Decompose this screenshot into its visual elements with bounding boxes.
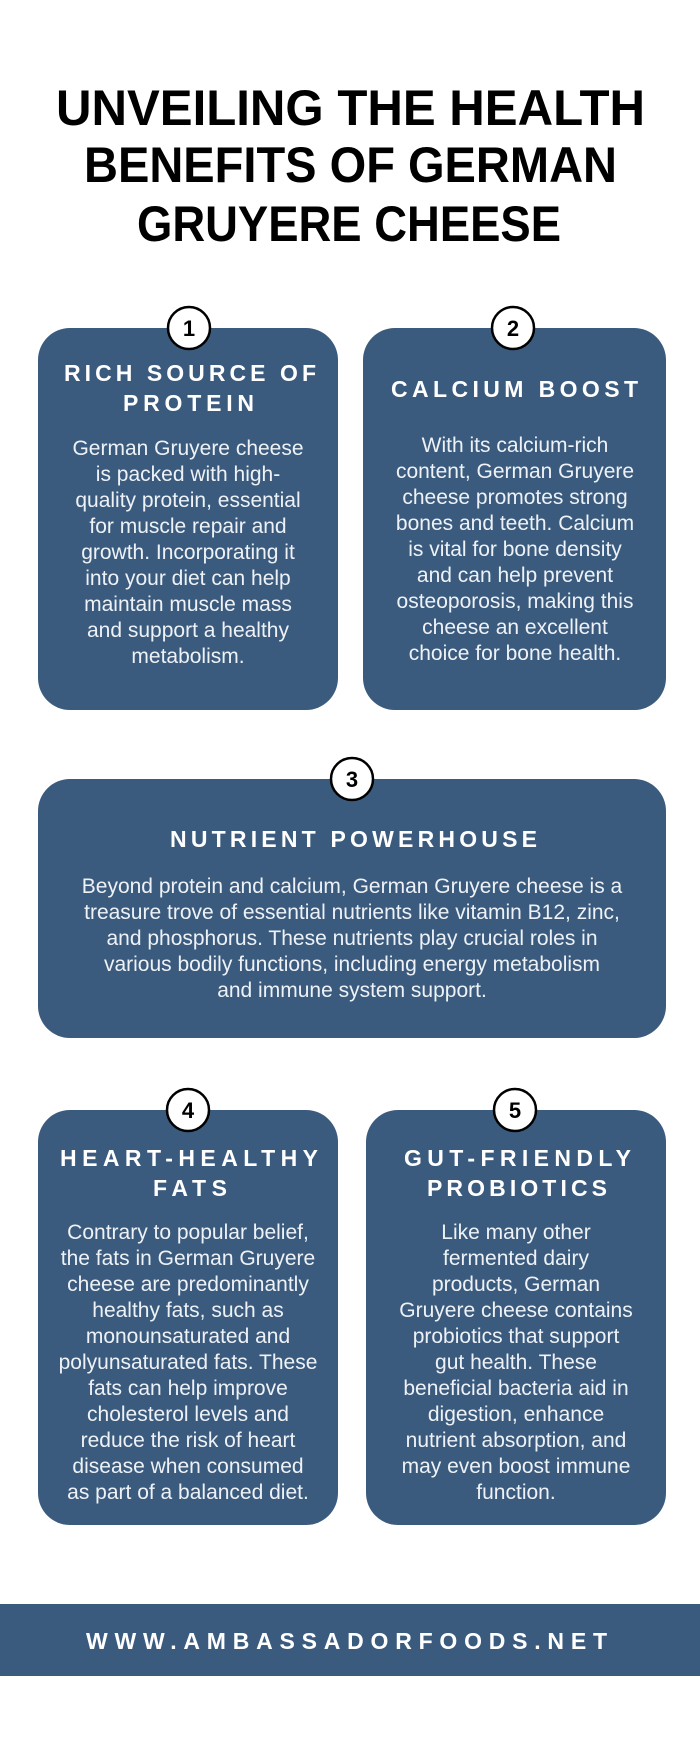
heading 4: FATS <box>153 1175 227 1201</box>
text 5: beneficial bacteria aid in <box>403 1377 629 1400</box>
text 5: products, German <box>432 1273 600 1296</box>
title: GRUYERE CHEESE <box>137 196 561 252</box>
text 2 <box>396 434 634 665</box>
badge 2: 2 <box>507 316 519 341</box>
badge 3 <box>331 758 373 800</box>
text 4: reduce the risk of heart <box>81 1429 296 1452</box>
text 5: probiotics that support <box>413 1325 619 1348</box>
text 3: various bodily functions, including energy metabolism <box>104 953 600 976</box>
text 4: Contrary to popular belief, <box>67 1221 309 1244</box>
text 4: the fats in German Gruyere <box>61 1247 315 1270</box>
badge 1: 1 <box>183 316 195 341</box>
text 1: maintain muscle mass <box>84 593 292 616</box>
text 5: may even boost immune <box>402 1455 630 1478</box>
text 1: is packed with high- <box>96 463 280 486</box>
text 4: fats can help improve <box>88 1377 288 1400</box>
badge 3: 3 <box>346 767 358 792</box>
text 5 <box>399 1221 633 1504</box>
text 3: and immune system support. <box>217 979 487 1002</box>
text 2: cheese an excellent <box>422 616 608 639</box>
text 5: nutrient absorption, and <box>406 1429 626 1452</box>
text 2: content, German Gruyere <box>396 460 634 483</box>
text 1: German Gruyere cheese <box>72 437 304 460</box>
text 2: is vital for bone density <box>408 538 622 561</box>
panel: nutrient powerhouse <box>38 758 666 1038</box>
text 2: cheese promotes strong <box>402 486 628 509</box>
text 4: healthy fats, such as <box>92 1299 284 1322</box>
text 3: treasure trove of essential nutrients like vitamin B12, zinc, <box>84 901 620 924</box>
badge 4: 4 <box>182 1098 195 1123</box>
text 5: fermented dairy <box>443 1247 589 1270</box>
text 2: choice for bone health. <box>409 642 621 665</box>
badge 5: 5 <box>509 1098 521 1123</box>
title: UNVEILING THE HEALTH <box>56 80 645 136</box>
title: BENEFITS OF GERMAN <box>84 137 617 193</box>
text 1: quality protein, essential <box>75 489 301 512</box>
heading 1 <box>64 360 316 416</box>
text 1: metabolism. <box>131 645 245 668</box>
footer: WWW.AMBASSADORFOODS.NET <box>86 1628 607 1654</box>
text 1: into your diet can help <box>85 567 291 590</box>
heading 1: RICH SOURCE OF <box>64 360 316 386</box>
panel: heart-healthy fats <box>38 1089 338 1525</box>
text 4: disease when consumed <box>72 1455 304 1478</box>
text 1: growth. Incorporating it <box>81 541 295 564</box>
text 2: bones and teeth. Calcium <box>396 512 634 535</box>
heading 4: HEART-HEALTHY <box>60 1145 318 1171</box>
heading 5: PROBIOTICS <box>427 1175 607 1201</box>
heading 5 <box>404 1145 631 1201</box>
badge 1 <box>168 307 210 349</box>
badge 4 <box>167 1089 209 1131</box>
text 3: Beyond protein and calcium, German Gruyere cheese is a <box>82 875 623 898</box>
heading 1: PROTEIN <box>123 390 254 416</box>
text 5: Gruyere cheese contains <box>399 1299 633 1322</box>
panel: gut-friendly probiotics <box>366 1089 666 1525</box>
heading 5: GUT-FRIENDLY <box>404 1145 631 1171</box>
badge 2 <box>492 307 534 349</box>
panel: rich source of protein <box>38 307 338 710</box>
text 2: With its calcium-rich <box>422 434 608 457</box>
title <box>56 80 645 252</box>
text 5: function. <box>476 1481 556 1504</box>
text 5: gut health. These <box>435 1351 597 1374</box>
text 5: digestion, enhance <box>428 1403 604 1426</box>
heading 2: CALCIUM BOOST <box>391 376 638 402</box>
text 1: and support a healthy <box>87 619 289 642</box>
text 4 <box>59 1221 317 1504</box>
text 4: cheese are predominantly <box>67 1273 309 1296</box>
text 4: as part of a balanced diet. <box>67 1481 309 1504</box>
text 2: osteoporosis, making this <box>397 590 633 613</box>
text 4: polyunsaturated fats. These <box>59 1351 317 1374</box>
text 2: and can help prevent <box>417 564 613 587</box>
heading 3: NUTRIENT POWERHOUSE <box>170 826 537 852</box>
text 4: monounsaturated and <box>86 1325 290 1348</box>
heading 4 <box>60 1145 318 1201</box>
panel: calcium boost <box>363 307 666 710</box>
text 3: and phosphorus. These nutrients play crucial roles in <box>106 927 598 950</box>
footer <box>0 1604 700 1676</box>
text 3 <box>82 875 623 1002</box>
badge 5 <box>494 1089 536 1131</box>
text 1 <box>72 437 304 668</box>
text 5: Like many other <box>441 1221 591 1244</box>
text 4: cholesterol levels and <box>87 1403 289 1426</box>
text 1: for muscle repair and <box>89 515 287 538</box>
